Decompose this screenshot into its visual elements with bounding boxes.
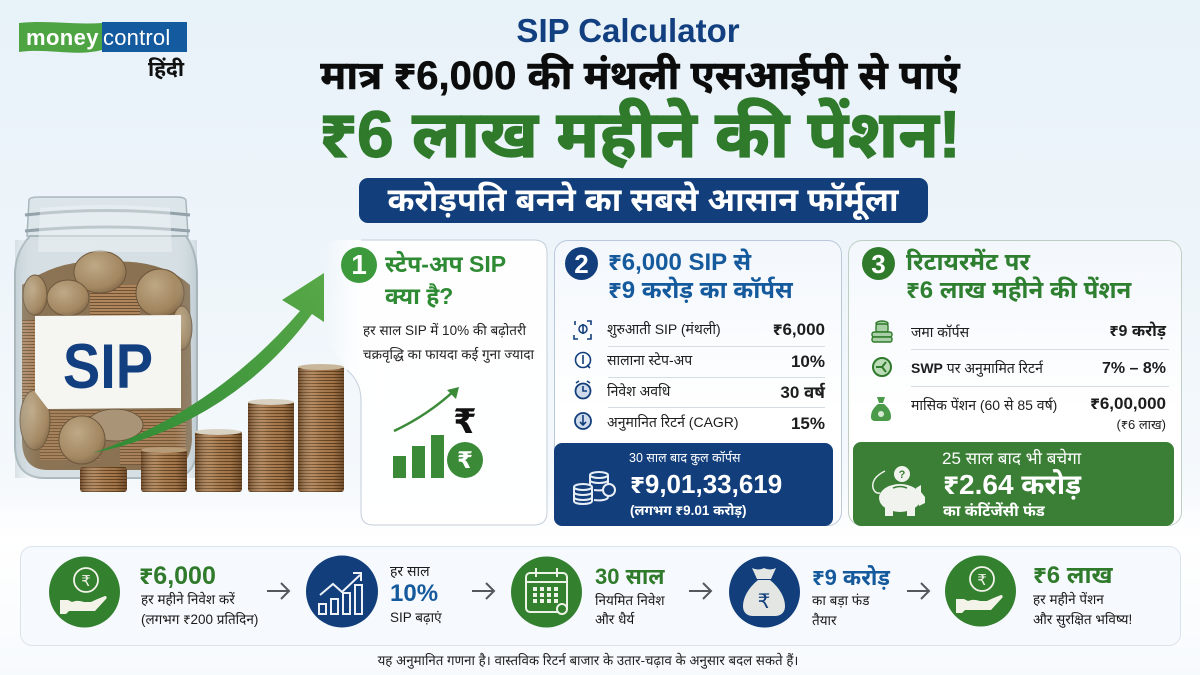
contingency box: [853, 442, 1174, 526]
panel 3 heading: ₹6 लाख महीने की पेंशन: [906, 277, 1131, 304]
row 3 note: (₹6 लाख): [1117, 417, 1166, 432]
step 5: [945, 556, 1132, 628]
corpus result box: [554, 443, 833, 526]
step 5 text: हर महीने पेंशन: [1033, 592, 1104, 607]
step 3 amount: 30 साल: [595, 564, 665, 589]
step 2 caption: हर साल: [390, 563, 430, 579]
panel 2 table: [573, 320, 826, 433]
step 2 value: 10%: [390, 580, 438, 607]
subtitle pill: [359, 178, 928, 223]
row 2 value: 10%: [791, 352, 825, 371]
box caption: 25 साल बाद भी बचेगा: [942, 449, 1081, 468]
row 3 icon: [871, 397, 891, 421]
jar: [15, 197, 197, 478]
panel 1 text: हर साल SIP में 10% की बढ़ोतरी: [363, 323, 526, 338]
panel 1 card: [343, 240, 548, 526]
row 3 icon: [574, 380, 592, 400]
step 4: [729, 556, 890, 628]
coin mass: [22, 261, 192, 470]
step 2: [306, 556, 442, 628]
row 2 label: SWP पर अनुमामित रिटर्न: [911, 360, 1043, 376]
panel 3 number badge: 3: [871, 249, 886, 279]
step 3: [511, 556, 665, 628]
stack 3: [195, 429, 242, 492]
row 1 label: जमा कॉर्पस: [911, 324, 969, 340]
logo hindi: हिंदी: [148, 58, 184, 81]
step 4 note: तैयार: [812, 613, 837, 628]
arrow 4: [907, 582, 930, 600]
row 3 label: मासिक पेंशन (60 से 85 वर्ष): [911, 397, 1057, 413]
logo flag: [19, 22, 187, 53]
headline line 2: ₹6 लाख महीने की पेंशन!: [319, 97, 961, 171]
row 2 icon: [574, 352, 592, 369]
jar highlight: [15, 240, 197, 478]
box amount: ₹2.64 करोड़: [943, 469, 1081, 500]
panel 3 number badge: [862, 247, 895, 280]
step 3 note: और धैर्य: [595, 612, 634, 627]
row 2 value: 7% – 8%: [1102, 360, 1166, 377]
step 4 text: का बड़ा फंड: [812, 593, 869, 608]
title: SIP Calculator: [516, 12, 740, 49]
panel 1 number badge: 1: [351, 249, 367, 280]
row 1 value: ₹6,000: [773, 320, 825, 339]
panel 1 text: चक्रवृद्धि का फायदा कई गुना ज्यादा: [363, 347, 534, 362]
panel 2 heading: [608, 248, 794, 304]
jar label text: SIP: [63, 331, 153, 402]
row 3 label: निवेश अवधि: [607, 383, 670, 399]
stack 4: [248, 399, 294, 492]
bottom process strip: [20, 546, 1181, 646]
panel 2 heading: ₹6,000 SIP से: [608, 249, 751, 276]
panel 2: corpus: [554, 240, 842, 526]
box note: का कंटिंजेंसी फंड: [943, 503, 1045, 520]
panel 1 number badge: [341, 247, 377, 283]
step 4 icon: money bag: ₹: [758, 589, 770, 613]
panel 3 heading: रिटायरमेंट पर: [906, 249, 1030, 276]
step 3 text: नियमित निवेश: [595, 593, 665, 608]
logo: moneycontrol hindi: [19, 22, 187, 81]
icon: coin stacks: [573, 471, 616, 505]
row 1 value: ₹9 करोड़: [1109, 323, 1166, 340]
step 5 icon: hand with rupee: [945, 556, 1016, 626]
headline line 1: मात्र ₹6,000 की मंथली एसआईपी से पाएं: [320, 54, 960, 98]
arrow 2: [472, 582, 496, 600]
step 1: [49, 556, 258, 628]
icon: growth chart with rupee: [393, 387, 483, 478]
jar and coin illustration: [14, 196, 344, 492]
step 3 icon: calendar: [511, 556, 582, 628]
row 4 icon: [574, 412, 592, 430]
row 4 label: अनुमानित रिटर्न (CAGR): [607, 414, 739, 430]
row 3 value: ₹6,00,000: [1090, 394, 1166, 413]
arrow 1: [267, 582, 290, 600]
step 4 amount: ₹9 करोड़: [812, 565, 890, 590]
step 4 icon: money bag: [729, 556, 800, 628]
result note: (लगभग ₹9.01 करोड़): [630, 503, 746, 518]
step 1 note: (लगभग ₹200 प्रतिदिन): [141, 612, 258, 627]
step 1 icon: hand with rupee: [49, 556, 120, 628]
panel 1 heading: स्टेप-अप SIP: [385, 251, 506, 277]
panel 1 heading: [385, 250, 506, 309]
panel 2 number badge: [565, 247, 598, 280]
step 2 text: SIP बढ़ाएं: [390, 610, 442, 625]
step 1 amount: ₹6,000: [139, 562, 216, 590]
stack 5: [298, 364, 344, 492]
step 5 icon: hand with rupee: ₹: [977, 571, 987, 589]
logo wordmark money: money: [26, 25, 99, 50]
growth arrow: [93, 273, 324, 453]
disclaimer: यह अनुमानित गणना है। वास्तविक रिटर्न बाजार के उतार-चढ़ाव के अनुसार बदल सकते हैं।: [378, 653, 798, 668]
row 2 label: सालाना स्टेप-अप: [607, 352, 692, 368]
icon: piggy bank: ?: [899, 469, 906, 481]
jar neck: [27, 197, 188, 236]
row 4 value: 15%: [791, 414, 825, 433]
row 1 label: शुरुआती SIP (मंथली): [607, 321, 721, 337]
step 1 text: हर महीने निवेश करें: [141, 592, 235, 607]
panel 2 heading: ₹9 करोड़ का कॉर्पस: [608, 277, 793, 304]
icon: growth chart with rupee: ₹: [457, 448, 473, 474]
result caption: 30 साल बाद कुल कॉर्पस: [629, 451, 740, 465]
step 2 icon: rising chart: [306, 556, 378, 628]
row 1 icon: [573, 320, 592, 340]
step 5 amount: ₹6 लाख: [1033, 562, 1113, 589]
arrow 3: [689, 582, 712, 600]
panel 3 table: [871, 320, 1169, 432]
step 5 note: और सुरक्षित भविष्य!: [1033, 612, 1132, 627]
stack 2: [141, 447, 187, 492]
icon: growth chart with rupee: ₹: [453, 402, 477, 442]
panel 3 heading: [906, 248, 1132, 304]
panel 3: pension: [848, 240, 1182, 526]
logo wordmark control: control: [103, 25, 170, 50]
panel 2 number badge: 2: [574, 249, 589, 279]
panel 1: step-up SIP: [341, 240, 548, 526]
jar body: [15, 236, 197, 478]
row 2 icon: [872, 357, 892, 377]
step 1 icon: hand with rupee: ₹: [81, 572, 91, 590]
panel 1 text: [363, 322, 534, 363]
icon: piggy bank: [872, 466, 925, 516]
jar label: [35, 315, 181, 409]
stack 1: [80, 467, 127, 492]
coin stacks: [80, 364, 344, 492]
subtitle text: करोड़पति बनने का सबसे आसान फॉर्मूला: [387, 182, 899, 218]
row 1 icon: [871, 320, 893, 343]
result amount: ₹9,01,33,619: [630, 469, 782, 499]
row 3 value: 30 वर्ष: [780, 383, 825, 402]
panel 1 heading: क्या है?: [385, 283, 453, 309]
